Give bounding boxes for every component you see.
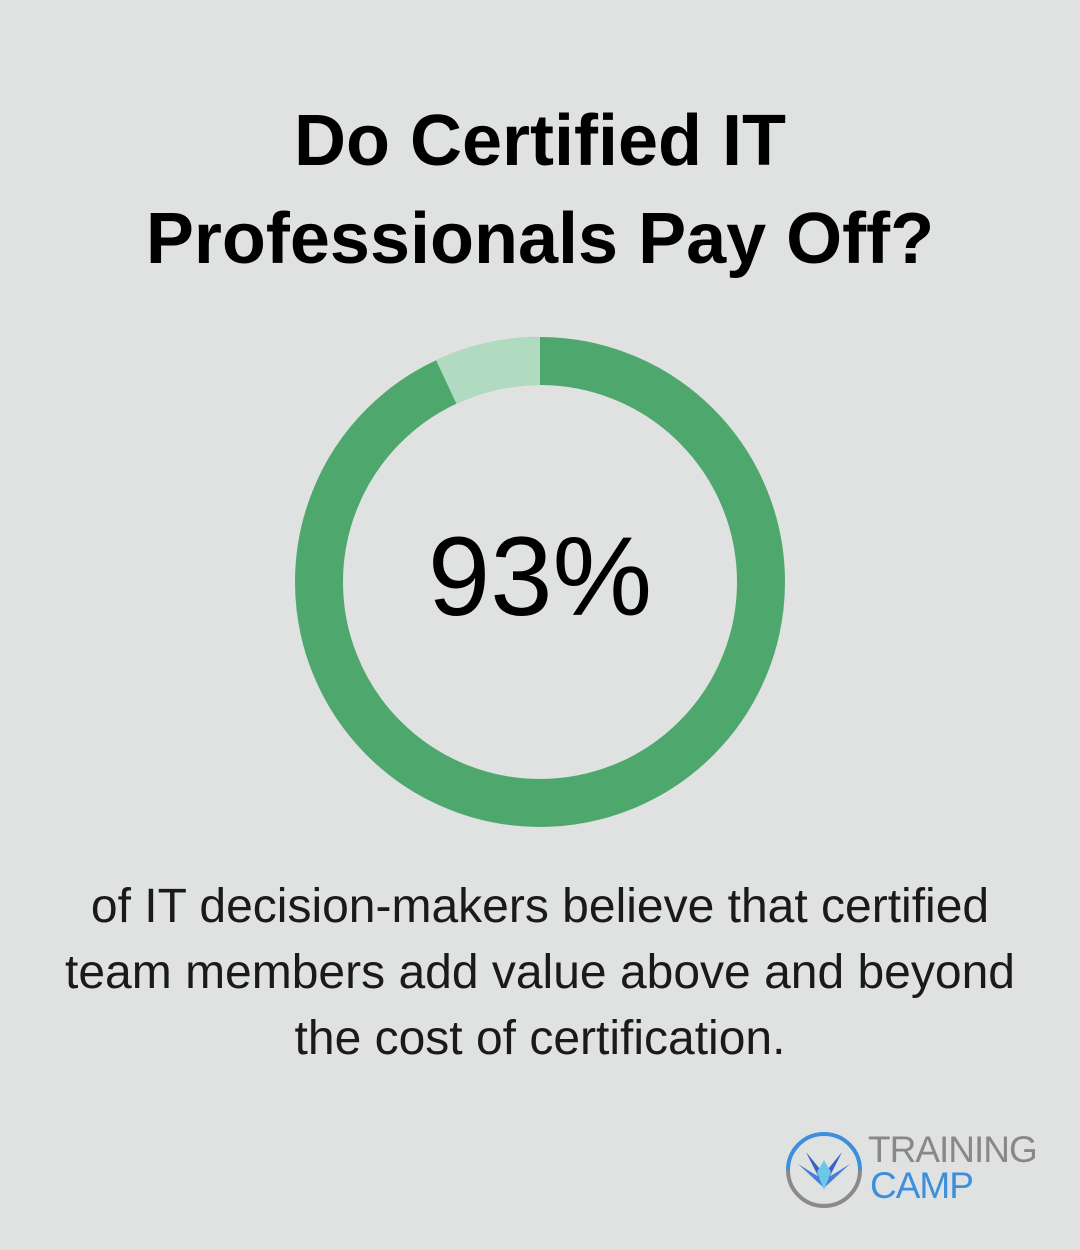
logo [786,1129,1037,1208]
description text: the cost of certification. [295,1012,785,1065]
title: Do Certified IT [294,101,786,181]
logo: CAMP [870,1165,973,1206]
description text: team members add value above and beyond [65,946,1015,999]
description text: of IT decision-makers believe that certified [91,880,989,933]
description text [65,880,1015,1065]
title [146,101,934,279]
donut chart: 93% [428,514,652,639]
title: Professionals Pay Off? [146,199,934,279]
logo: TRAINING [868,1129,1037,1170]
